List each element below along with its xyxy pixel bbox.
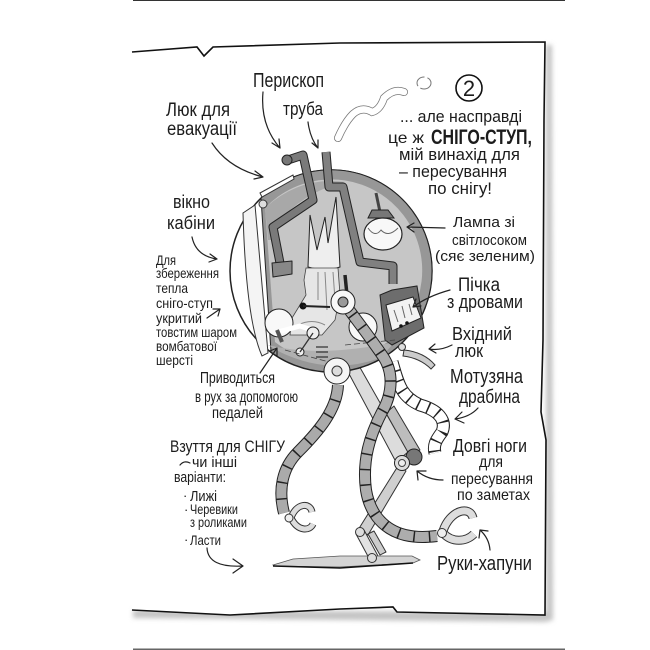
label: entry hatch: люк (455, 341, 483, 361)
label: snow footwear list: · (184, 502, 188, 517)
label: cabin window: кабіни (167, 213, 215, 233)
label: snow footwear list: з роликами (190, 514, 247, 530)
lamp (364, 193, 402, 250)
label: snow footwear list: · (184, 532, 188, 547)
label: stove (413, 275, 523, 312)
label: pedals: в рух за допомогою (195, 389, 298, 406)
label: snow footwear list: Ласти (190, 532, 221, 548)
label: pedals: Приводиться (200, 370, 275, 387)
crown (308, 197, 340, 270)
label: cabin window: вікно (173, 192, 210, 212)
label: snow footwear list: варіанти: (174, 469, 226, 486)
label: entry hatch (429, 324, 512, 361)
label: rope ladder: драбина (459, 387, 520, 408)
label: snow footwear list: Взуття для СНІГУ (170, 437, 285, 456)
label: grabber hands: Руки-хапуни (437, 553, 532, 575)
label: lamp: Лампа зі (453, 214, 515, 231)
label: long legs: Довгі ноги (453, 436, 527, 456)
label: wool note (156, 252, 237, 368)
label: chimney (283, 99, 324, 148)
label: intro text (388, 107, 532, 198)
label: wool note: сніго-ступ (156, 295, 213, 311)
number badge 2 (456, 75, 482, 101)
label: long legs: для (479, 454, 503, 471)
label: chimney: труба (283, 99, 324, 119)
smoke (338, 77, 431, 138)
label: snow footwear list: · (183, 488, 187, 503)
label: intro text: це ж (388, 130, 424, 147)
label: intro text: – пересування (399, 162, 507, 181)
label: escape hatch (166, 100, 263, 179)
cabin door (243, 205, 268, 356)
number badge 2: 2 (463, 76, 475, 101)
label: long legs: по заметах (457, 487, 530, 504)
snow-stepper ball (230, 152, 435, 384)
label: long legs: пересування (451, 471, 533, 488)
label: wool note: товстим шаром (156, 324, 237, 340)
long right segmented arm with claw (331, 290, 474, 540)
label: rope ladder: Мотузяна (450, 366, 524, 388)
label: intro text: мій винахід для (399, 145, 520, 164)
label: intro text: СНІГО-СТУП, (431, 126, 532, 149)
chimney pipe (326, 152, 393, 284)
periscope (272, 155, 313, 277)
entry hatch flap (398, 344, 435, 369)
label: pedals: педалей (212, 405, 263, 422)
pedals and wheels (265, 309, 395, 384)
label: snow footwear list: чи інші (192, 454, 237, 471)
label: wool note: Для (156, 252, 176, 268)
label: periscope: Перископ (253, 70, 324, 92)
label: stove: з дровами (447, 292, 523, 312)
label: lamp (407, 214, 535, 265)
label: entry hatch: Вхідний (452, 324, 512, 344)
label: long legs (417, 436, 533, 504)
label: escape hatch: евакуації (167, 119, 238, 140)
label: periscope (253, 70, 324, 148)
label: lamp: світлосоком (452, 232, 527, 249)
label: intro text: ... але насправді (400, 107, 522, 126)
label: rope ladder (450, 366, 524, 423)
label: grabber hands (437, 530, 532, 575)
foot (273, 554, 420, 568)
label: intro text: по снігу! (428, 179, 492, 198)
hand-drawn frame (132, 42, 553, 622)
stove (380, 286, 424, 345)
label: lamp: (сяє зеленим) (435, 248, 535, 265)
label: escape hatch: Люк для (166, 100, 230, 121)
label: wool note: вомбатової (156, 338, 217, 354)
label: cabin window (167, 192, 217, 262)
label: wool note: тепла (156, 280, 188, 296)
label: wool note: укритий (156, 310, 202, 326)
label: snow footwear list: Лижі (190, 488, 217, 505)
label: wool note: збереження (156, 265, 219, 281)
label: snow footwear list: Черевики (190, 501, 238, 517)
page edge lines (133, 0, 565, 650)
escape hatch (260, 175, 294, 197)
label: wool note: шерсті (156, 352, 193, 368)
rope ladder (392, 362, 443, 453)
left segmented arm with claw (281, 385, 338, 529)
label: stove: Пічка (458, 275, 500, 296)
label: snow footwear list (170, 437, 285, 573)
label: pedals (195, 348, 298, 422)
legs (347, 364, 422, 560)
pilot with beard (290, 268, 347, 335)
